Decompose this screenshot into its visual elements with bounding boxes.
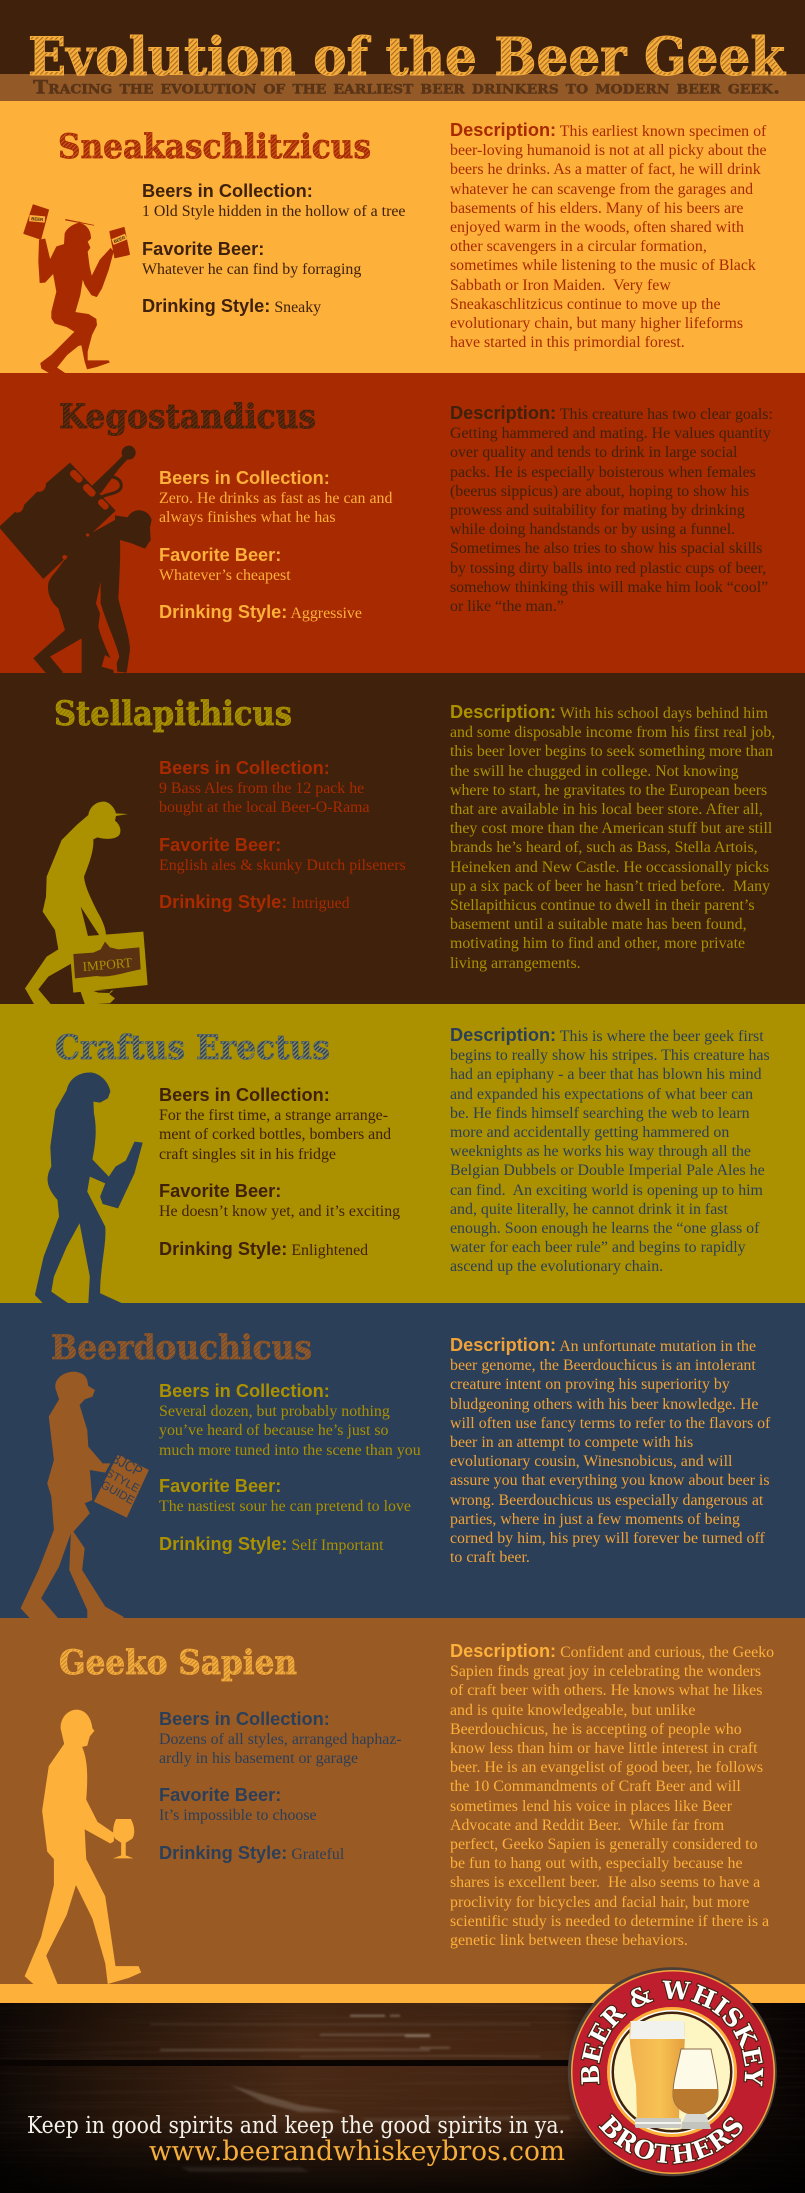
icon: figure carrying an import beer box xyxy=(25,802,148,1005)
text: favorite beer: Favorite Beer: Whatever’s cheapest xyxy=(159,545,291,584)
text: description: Description: Confident and curious, the Geeko Sapien finds great joy in celebrating the wonders of craft beer with others. He knows what he likes and is quite knowledgeable, but unlike Beerdouchicus, he is accepting of people who know less than him or have little interest in craft beer. He is an evangelist of good beer, he follows the 10 Commandments of Craft Beer and will sometimes lend his voice in places like Beer Advocate and Reddit Beer. While far from perfect, Geeko Sapien is generally considered to be fun to hang out with, especially because he shares is excellent beer. He also seems to have a proclivity for bicycles and facial hair, but more scientific study is needed to determine if there is a genetic link between these behaviors. xyxy=(450,1641,774,1949)
footer: wood panel with tagline xyxy=(0,2003,805,2193)
divider strip xyxy=(0,1984,805,2003)
icon: upright figure holding a bottle xyxy=(35,1073,143,1304)
panel: Beerdouchicus xyxy=(0,1303,805,1618)
text: drinking style: Drinking Style: Sneaky xyxy=(142,296,321,316)
badge text top: BEER & WHISKEY xyxy=(580,1979,764,2088)
text: favorite beer: Favorite Beer: Whatever he can find by forraging xyxy=(142,239,361,278)
text: drinking style: Drinking Style: Intrigued xyxy=(159,892,350,912)
icon: figure carrying a style guide book: BJCP xyxy=(108,1450,145,1480)
text: beers in collection: Beers in Collection: For the first time, a strange arrange- ment of corked bottles, bombers and craft singles sit in his fridge xyxy=(159,1085,391,1163)
text: description: Description: With his school days behind him and some disposable income from his first real job, this beer lover begins to seek something more than the swill he chugged in college. Not knowing where to start, he gravitates to the European beers that are available in his local beer store. After all, they cost more than the American stuff but are still brands he’s heard of, such as Bass, Stella Artois, Heineken and New Castle. He occassionally picks up a six pack of beer he hasn’t tried before. Many Stellapithicus continue to dwell in their parent’s basement until a suitable mate has been found, motivating him to find and other, more private living arrangements. xyxy=(450,702,775,972)
text: beers in collection: Beers in Collection: 1 Old Style hidden in the hollow of a tree xyxy=(142,181,405,220)
icon: figure carrying a style guide book: STYLE xyxy=(104,1467,142,1495)
text: favorite beer: Favorite Beer: It’s impossible to choose xyxy=(159,1785,317,1824)
text: beers in collection: Beers in Collection: Zero. He drinks as fast as he can and always finishes what he has xyxy=(159,468,392,526)
text: beers in collection: Beers in Collection: Several dozen, but probably nothing you’ve heard of because he’s just so much more tuned into the scene than you xyxy=(159,1381,421,1459)
panel: Geeko Sapien xyxy=(0,1618,805,1984)
tagline: Keep in good spirits and keep the good spirits in ya. xyxy=(27,2113,565,2139)
text: favorite beer: Favorite Beer: He doesn’t know yet, and it’s exciting xyxy=(159,1181,400,1220)
heading: Craftus Erectus: Craftus Erectus xyxy=(55,1028,330,1068)
text: description: Description: This earliest known specimen of beer-loving humanoid is not at all picky about the beers he drinks. As a matter of fact, he will drink whatever he can scavenge from the garages and basements of his elders. Many of his beers are enjoyed warm in the woods, often shared with other scavengers in a circular formation, sometimes while listening to the music of Black Sabbath or Iron Maiden. Very few Sneakaschlitzicus continue to move up the evolutionary chain, but many higher lifeforms have started in this primordial forest. xyxy=(450,120,767,351)
title: Evolution of the Beer Geek xyxy=(28,27,786,88)
icon: figure carrying an import beer box: IMPORT xyxy=(82,955,133,974)
panel: Kegostandicus xyxy=(0,373,805,673)
website url: www.beerandwhiskeybros.com xyxy=(149,2136,565,2167)
text: drinking style: Drinking Style: Grateful xyxy=(159,1843,344,1863)
icon: figure carrying a keg xyxy=(0,446,152,674)
icon: pint glass xyxy=(629,2021,685,2128)
text: drinking style: Drinking Style: Self Important xyxy=(159,1534,384,1554)
heading: Stellapithicus: Stellapithicus xyxy=(54,694,292,734)
logo: Beer and Whiskey Brothers badge xyxy=(568,1967,777,2176)
heading: Sneakaschlitzicus: Sneakaschlitzicus xyxy=(58,127,371,167)
icon: figure carrying a style guide book xyxy=(21,1372,149,1619)
heading: Kegostandicus: Kegostandicus xyxy=(59,397,316,437)
header banner xyxy=(0,27,805,101)
icon: figure carrying a style guide book: GUIDE xyxy=(99,1479,137,1507)
icon: whiskey snifter xyxy=(673,2049,718,2129)
text: favorite beer: Favorite Beer: The nastiest sour he can pretend to love xyxy=(159,1476,411,1515)
text: drinking style: Drinking Style: Enlightened xyxy=(159,1239,368,1259)
text: beers in collection: Beers in Collection: 9 Bass Ales from the 12 pack he bought at the local Beer-O-Rama xyxy=(159,758,370,816)
text: description: Description: An unfortunate mutation in the beer genome, the Beerdouchicus is an intolerant creature intent on proving his superiority by bludgeoning others with his beer knowledge. He will often use fancy terms to refer to the flavors of beer in an attempt to compete with his evolutionary cousin, Winesnobicus, and will assure you that everything you know about beer is wrong. Beerdouchicus us especially dangerous at parties, where in just a few moments of being corned by him, his prey will forever be turned off to craft beer. xyxy=(450,1335,770,1566)
panel: Stellapithicus xyxy=(0,673,805,1004)
heading: Beerdouchicus: Beerdouchicus xyxy=(51,1328,312,1368)
badge text bottom: BROTHERS xyxy=(597,2112,744,2165)
icon: caveman silhouette holding two beer cans: BEER xyxy=(31,216,44,222)
icon: caveman silhouette holding two beer cans xyxy=(24,205,129,373)
icon: figure holding a tulip glass xyxy=(25,1710,141,1984)
text: description: Description: This is where the beer geek first begins to really show his stripes. This creature has had an epiphany - a beer that has blown his mind and expanded his expectations of what beer can be. He finds himself searching the web to learn more and accidentally getting hammered on weeknights as he works his way through all the Belgian Dubbels or Double Imperial Pale Ales he can find. An exciting world is opening up to him and, quite literally, he cannot drink it in fast enough. Soon enough he learns the “one glass of water for each beer rule” and begins to rapidly ascend up the evolutionary chain. xyxy=(450,1025,770,1275)
heading: Geeko Sapien: Geeko Sapien xyxy=(59,1643,297,1683)
subtitle: Tracing the evolution of the earliest beer drinkers to modern beer geek. xyxy=(33,76,780,98)
text: favorite beer: Favorite Beer: English ales & skunky Dutch pilseners xyxy=(159,835,406,874)
text: description: Description: This creature has two clear goals: Getting hammered and mating. He values quantity over quality and tends to drink in large social packs. He is especially boisterous when females (beerus sippicus) are about, hoping to show his prowess and suitability for mating by drinking while doing handstands or by using a funnel. Sometimes he also tries to show his spacial skills by tossing dirty balls into red plastic cups of beer, somehow thinking this will make him look “cool” or like “the man.” xyxy=(450,403,773,615)
icon: caveman silhouette holding two beer cans: BEER xyxy=(113,235,127,244)
text: drinking style: Drinking Style: Aggressive xyxy=(159,602,362,622)
text: beers in collection: Beers in Collection: Dozens of all styles, arranged haphaz- ardly in his basement or garage xyxy=(159,1709,402,1767)
panel: Sneakaschlitzicus xyxy=(0,101,805,373)
panel: Craftus Erectus xyxy=(0,1004,805,1303)
